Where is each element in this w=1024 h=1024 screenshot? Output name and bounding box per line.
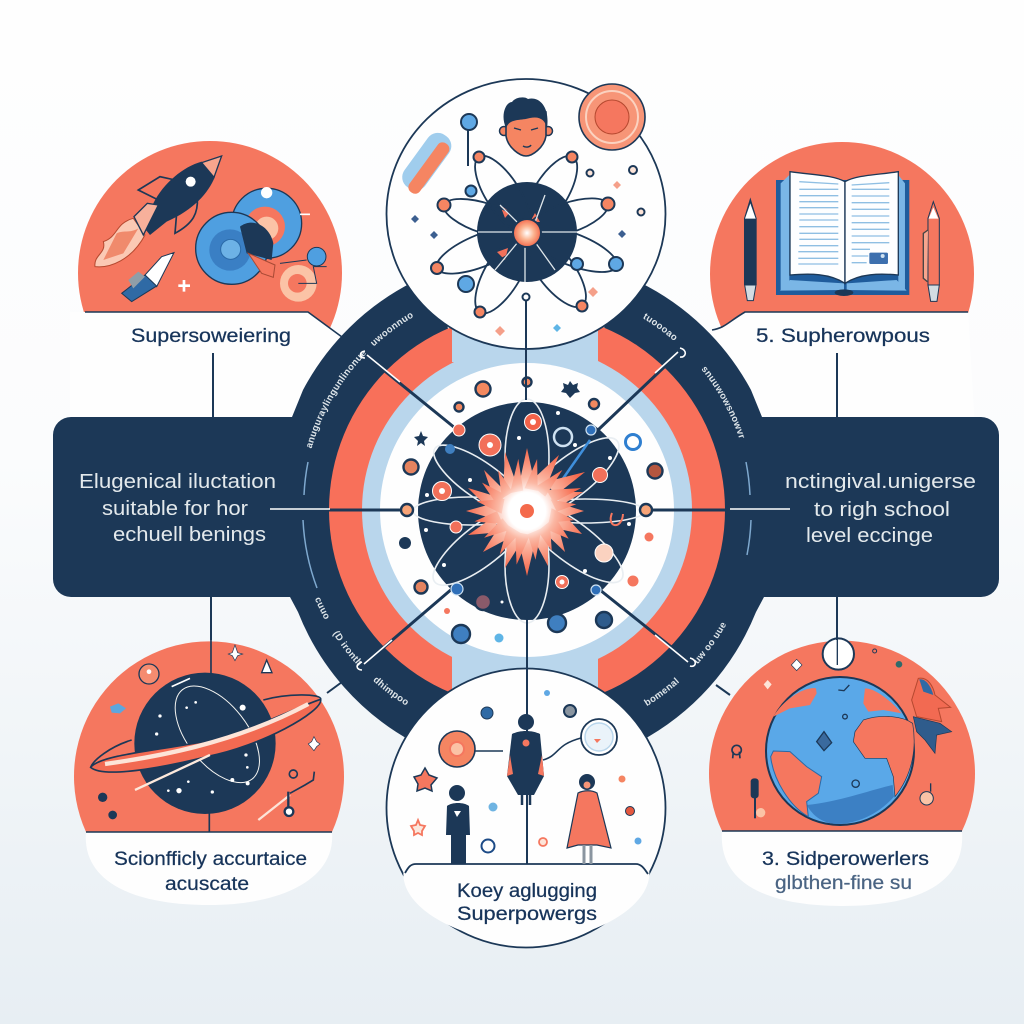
central hub rings — [53, 282, 999, 742]
blue dot — [494, 634, 504, 642]
coral ring — [329, 312, 725, 708]
stars — [399, 381, 580, 549]
badge inner — [585, 723, 613, 751]
inner node highlights — [424, 411, 631, 604]
white circle — [386, 79, 666, 349]
inner nodes — [432, 414, 613, 588]
label text: 3. Sidperowerlers — [762, 849, 929, 870]
coral ring mark — [611, 513, 623, 525]
label text: Supersoweiering — [131, 326, 291, 347]
upper left ring label: anuguraylingunlinonue — [307, 351, 366, 448]
connector spokes — [270, 352, 790, 666]
sun disc — [579, 84, 645, 150]
label text: 5. Supherowpous — [756, 326, 930, 347]
card edge — [712, 312, 968, 330]
connector lines — [211, 353, 837, 695]
target inner — [450, 742, 464, 756]
open book and pencils — [744, 172, 939, 301]
legs — [522, 790, 530, 805]
target outer — [439, 731, 475, 767]
red sparks — [497, 205, 540, 260]
lower left ring label three: dhimpoo — [374, 678, 408, 705]
lower left ring label: cuuo — [316, 598, 328, 619]
head — [518, 714, 534, 730]
inner light spokes — [478, 195, 577, 282]
lower right ring label: bomenal — [644, 677, 679, 706]
orbit petals — [431, 148, 622, 321]
cape — [507, 731, 544, 795]
cape accents — [507, 755, 544, 776]
card edge — [85, 312, 342, 337]
sun outer — [579, 84, 645, 150]
card edge — [86, 831, 332, 833]
standing hero left — [446, 785, 470, 864]
line one: Elugenical iluctation — [79, 471, 276, 493]
head — [449, 785, 465, 801]
body — [446, 803, 470, 864]
label text: Scionfficly accurtaice — [114, 849, 307, 870]
panel: bottom-left planet — [74, 640, 344, 905]
top and bottom blue wedges — [452, 300, 598, 720]
navy ring left and side bar — [53, 282, 500, 742]
orbit paths — [413, 399, 645, 623]
atom nucleus — [513, 219, 541, 247]
line two: suitable for hor — [102, 498, 248, 520]
starburst secondary spikes — [466, 449, 585, 574]
blue ring orb — [626, 434, 640, 450]
panel: bottom heroes circle — [386, 590, 666, 948]
badge mark — [594, 739, 601, 743]
eyes and mouth — [514, 128, 538, 147]
emblem — [454, 811, 461, 817]
upper right ring short label: tuoooao — [644, 313, 676, 340]
lower right ring label two: uw oo uue — [694, 622, 726, 664]
face — [584, 782, 590, 788]
globe and rocket — [732, 620, 952, 825]
label card — [722, 831, 962, 906]
central cosmos illustration — [270, 348, 790, 670]
coral nodes — [431, 152, 614, 318]
badge — [581, 719, 617, 755]
label card — [70, 312, 352, 430]
small ring dots — [586, 166, 644, 216]
diamonds — [411, 181, 626, 336]
card edge — [722, 830, 962, 832]
side bar text left — [79, 471, 276, 546]
blue hub nodes — [451, 425, 601, 595]
label text: Koey aglugging — [457, 881, 597, 902]
blue nodes — [458, 114, 623, 292]
head — [506, 112, 546, 156]
label card — [403, 864, 649, 942]
coral backdrop — [709, 641, 975, 831]
label text line two: acuscate — [165, 874, 249, 895]
central stem line — [526, 590, 528, 864]
ring micro labels — [307, 313, 744, 706]
central starburst — [466, 448, 585, 576]
panel: top-right book — [700, 142, 975, 430]
card edge — [405, 864, 648, 874]
line three: echuell benings — [113, 524, 266, 546]
blue streak — [555, 440, 590, 490]
coral backdrop — [74, 641, 344, 832]
legs — [584, 845, 591, 864]
line three: level eccinge — [806, 525, 933, 547]
small coral marks — [444, 532, 654, 614]
ringed planet and sparkles — [91, 640, 321, 832]
hair — [504, 97, 548, 128]
label card — [86, 832, 332, 905]
navy ring right and side bar — [550, 282, 999, 742]
upper right ring label: snuuwowsnowvr — [702, 366, 744, 438]
label text line two: Superpowergs — [457, 904, 597, 925]
burst core — [520, 504, 534, 518]
blue swirl — [445, 444, 455, 454]
line two: to righ school — [814, 499, 950, 521]
emblem — [522, 740, 530, 746]
gauge badge and link — [543, 719, 617, 760]
coral backdrop — [710, 142, 974, 406]
sun centre — [595, 100, 629, 134]
atom core disc — [477, 182, 577, 282]
sun rings — [586, 91, 638, 143]
head — [579, 774, 595, 790]
face icon — [500, 97, 552, 156]
link curve — [543, 738, 581, 760]
thin blue arcs — [303, 462, 751, 588]
stars and dots — [411, 690, 642, 852]
rocket and disc icons — [95, 156, 327, 302]
light blue ring — [362, 345, 692, 675]
white ring — [380, 363, 674, 657]
panel: bottom-right globe — [709, 620, 975, 906]
link line — [475, 750, 503, 752]
coral target and link — [439, 731, 503, 767]
label text line two: glbthen-fine su — [775, 873, 912, 894]
surrounding orbs — [401, 378, 662, 643]
spoke end rings — [357, 348, 695, 670]
upper left ring short label: uwoonnuo — [370, 313, 413, 346]
caped heroine right — [567, 774, 611, 864]
coral backdrop — [78, 141, 342, 405]
ears — [500, 126, 508, 136]
dark cosmos disc — [418, 402, 636, 620]
side bar text right — [785, 471, 976, 547]
pin stem — [468, 130, 526, 400]
white circle — [386, 668, 666, 948]
lower left ring label two: (D ironth — [332, 631, 362, 666]
label card — [700, 312, 975, 430]
line one: nctingival.unigerse — [785, 471, 976, 493]
panel: top-left rocket — [70, 141, 352, 430]
swirl rings — [554, 428, 572, 446]
cape — [567, 791, 611, 848]
blue capsule icon — [396, 128, 456, 197]
panel: top atom circle — [386, 79, 666, 400]
caped hero centre — [507, 714, 544, 805]
top pin — [522, 294, 530, 300]
